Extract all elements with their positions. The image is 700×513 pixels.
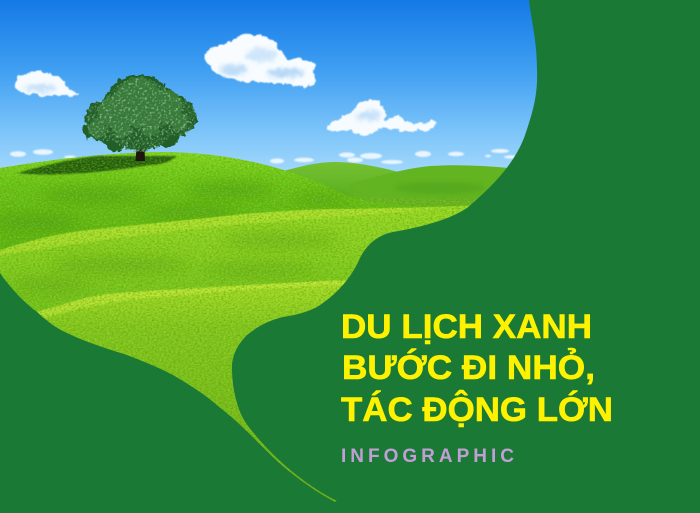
front hill xyxy=(0,205,480,513)
cloud: large xyxy=(203,34,315,85)
green shape: left xyxy=(0,273,700,513)
grass texture xyxy=(0,152,477,502)
lower hill xyxy=(37,280,352,513)
green shape: right xyxy=(232,0,700,500)
main hill xyxy=(0,152,440,270)
canopy xyxy=(82,74,200,156)
tree shadow xyxy=(18,156,177,175)
small horizon clouds xyxy=(10,149,518,164)
tree xyxy=(82,74,200,161)
subtitle: INFOGRAPHIC xyxy=(341,446,514,467)
title: DU LỊCH XANH xyxy=(341,308,592,346)
title: TÁC ĐỘNG LỚN xyxy=(341,390,613,429)
cloud: left xyxy=(15,72,78,96)
trunk xyxy=(136,140,145,161)
distant hills xyxy=(280,162,540,240)
title xyxy=(341,308,613,429)
cloud: right xyxy=(326,100,437,134)
sky background xyxy=(0,0,545,175)
title: BƯỚC ĐI NHỎ, xyxy=(342,349,595,387)
